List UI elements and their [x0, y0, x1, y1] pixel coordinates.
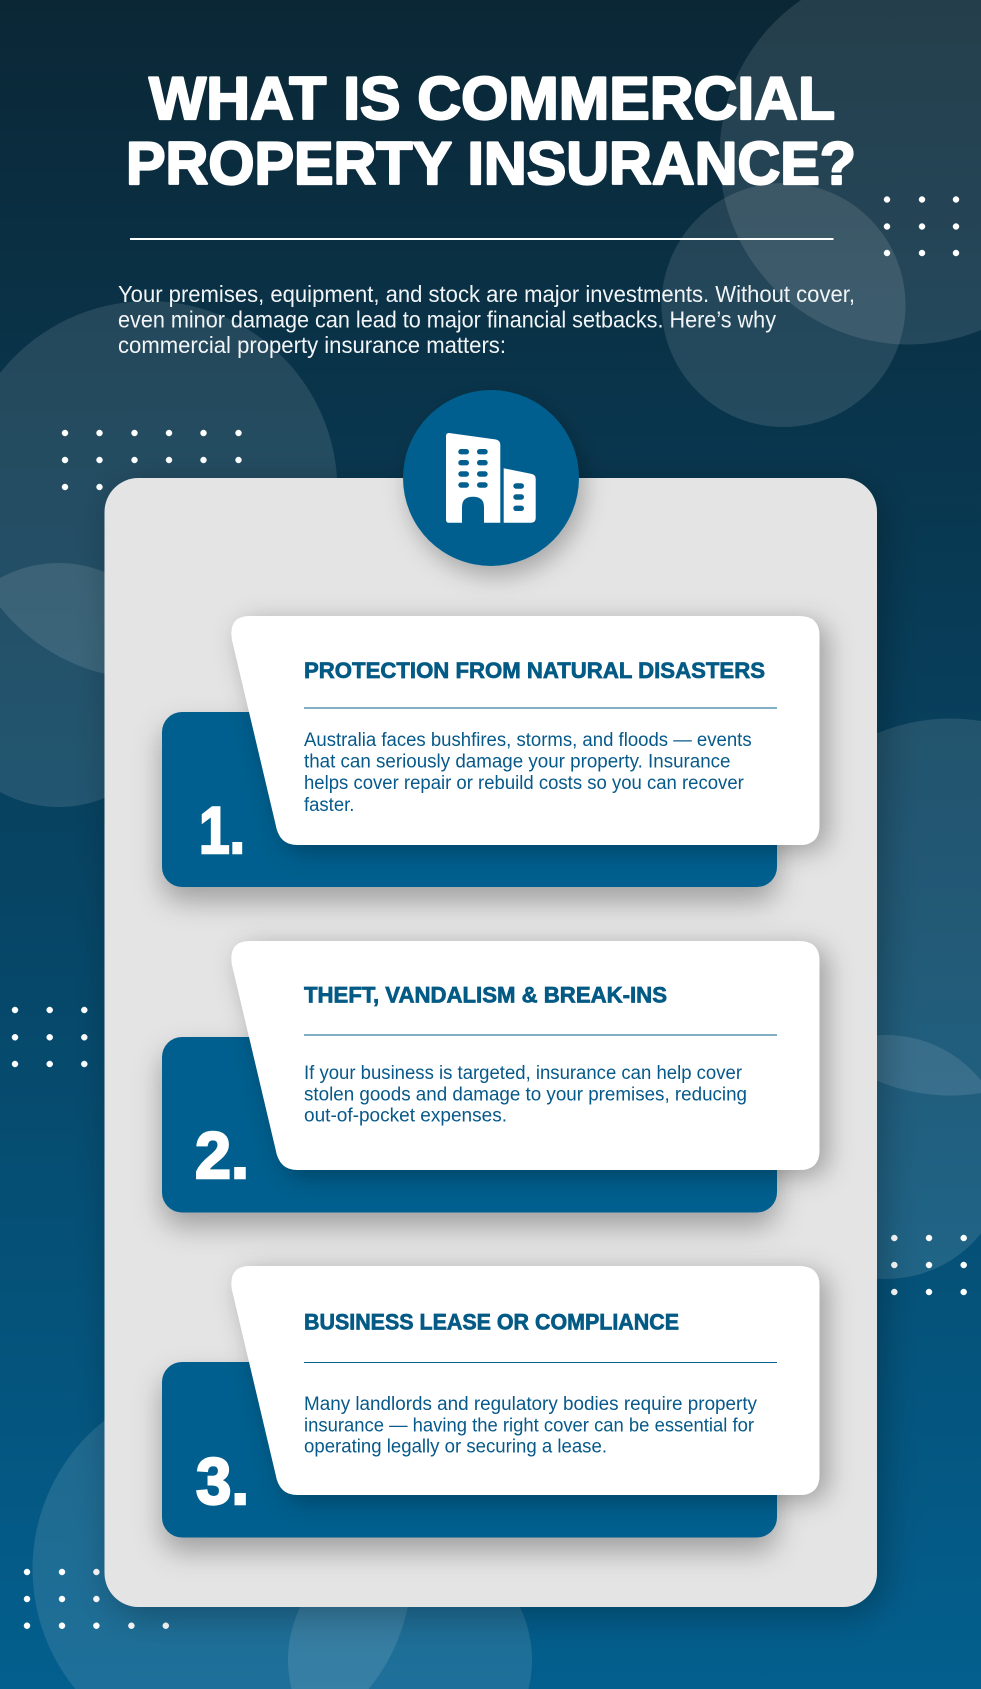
card 1: natural disasters: PROTECTION FROM NATURAL DISASTERS	[304, 658, 765, 683]
card 2: theft and vandalism: THEFT, VANDALISM & BREAK-INS	[304, 983, 667, 1008]
card 1: natural disasters: that can seriously damage your property. Insurance	[304, 752, 730, 772]
card 1: natural disasters: faster.	[304, 795, 354, 816]
title	[126, 65, 856, 197]
card 2: theft and vandalism: 2.	[195, 1118, 249, 1192]
card 1: natural disasters: Australia faces bushfires, storms, and floods — events	[304, 730, 752, 751]
dot grid: lower right	[891, 1235, 967, 1295]
icon badge: buildings	[403, 390, 579, 566]
card 3: lease or compliance: Many landlords and regulatory bodies require property	[304, 1394, 757, 1415]
card 1: natural disasters: helps cover repair or rebuild costs so you can recover	[304, 773, 744, 794]
intro text: Your premises, equipment, and stock are major investments. Without cover,	[118, 281, 855, 307]
card 1: natural disasters	[162, 616, 820, 887]
card 3: lease or compliance	[162, 1266, 820, 1538]
intro text: even minor damage can lead to major financial setbacks. Here’s why	[118, 306, 776, 332]
card 3: lease or compliance: BUSINESS LEASE OR COMPLIANCE	[304, 1309, 679, 1334]
dot grid: top right	[884, 196, 959, 256]
intro text: commercial property insurance matters:	[118, 332, 506, 358]
card 3: lease or compliance: operating legally or securing a lease.	[304, 1437, 607, 1458]
card 2: theft and vandalism	[162, 941, 820, 1212]
card 2: theft and vandalism: out-of-pocket expenses.	[304, 1106, 507, 1127]
card 2: theft and vandalism: stolen goods and damage to your premises, reducing	[304, 1084, 747, 1105]
dot grid: middle left	[12, 1007, 87, 1067]
dot grid: upper left	[62, 430, 242, 490]
card 3: lease or compliance: 3.	[196, 1444, 249, 1518]
card 1: natural disasters: 1.	[199, 793, 245, 867]
intro text	[118, 281, 855, 358]
card 3: lease or compliance: insurance — having the right cover can be essential for	[304, 1416, 755, 1437]
main panel	[104, 478, 877, 1607]
dot grid: bottom left	[24, 1569, 169, 1629]
title: WHAT IS COMMERCIAL	[149, 65, 835, 132]
title: PROPERTY INSURANCE?	[126, 130, 856, 197]
card 2: theft and vandalism: If your business is targeted, insurance can help cover	[304, 1063, 743, 1084]
